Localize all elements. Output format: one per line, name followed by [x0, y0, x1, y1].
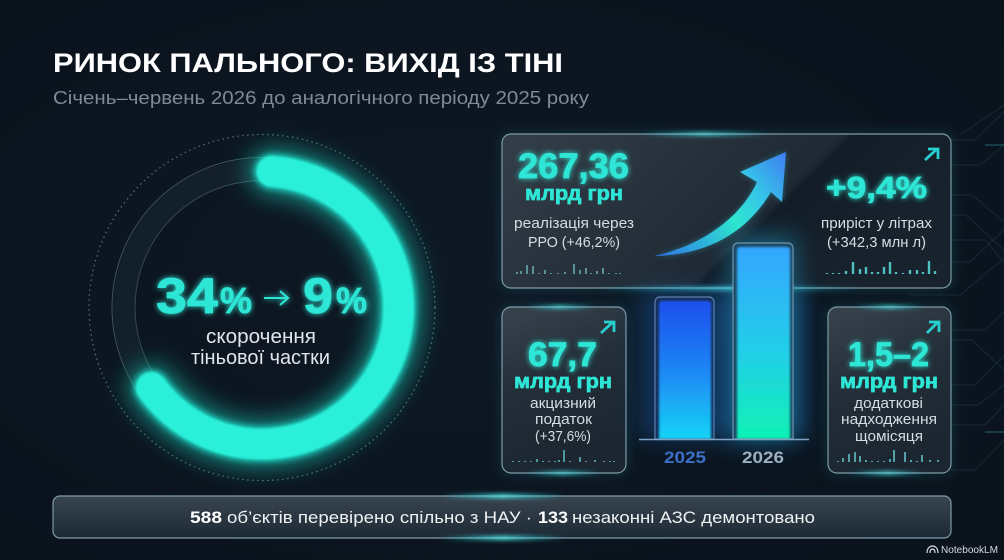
description: monthly additional income: щомісяця: [855, 428, 923, 445]
description: excise tax: податок: [535, 411, 592, 428]
donut value: 34% to 9%: 9: [303, 268, 333, 324]
metric: +9,4%: +9,4%: [826, 170, 927, 205]
description: RRO sales: [514, 215, 634, 251]
description: litres growth: приріст у літрах: [821, 215, 932, 232]
icon: up-right arrow: [927, 322, 939, 333]
panel: revenue and volume: [502, 132, 951, 290]
description: litres growth: (+342,3 млн л): [827, 234, 926, 251]
description: excise tax: (+37,6%): [535, 428, 591, 445]
description: excise tax: [530, 395, 596, 445]
panel: excise tax: [502, 306, 626, 474]
description: RRO sales: реалізація через: [514, 215, 634, 232]
bar chart: [639, 236, 809, 467]
NotebookLM mark: NotebookLM: [941, 545, 998, 556]
donut value: 34% to 9%: %: [336, 280, 367, 321]
donut caption: [191, 326, 330, 369]
footer text: об’єктів перевірено спільно з НАУ ·: [227, 508, 532, 527]
mini bars: [827, 261, 935, 274]
donut caption: тіньової частки: [191, 347, 330, 369]
icon: up-right arrow: [925, 149, 938, 160]
icon: up-right arrow: [601, 322, 614, 333]
mini bars: [517, 264, 620, 274]
description: litres growth: [821, 215, 932, 251]
unit: billion UAH: млрд грн: [514, 371, 612, 393]
metric: 267,36: 267,36: [518, 147, 629, 186]
footer bar: [53, 494, 951, 540]
footer text: 133: [538, 508, 568, 527]
unit: billion UAH: млрд грн: [525, 183, 623, 205]
description: monthly additional income: [841, 395, 937, 445]
unit: billion UAH: млрд грн: [840, 371, 938, 393]
bar: 2025: [655, 297, 714, 439]
bar: 2026: [730, 236, 796, 439]
footer text: 588: [190, 508, 222, 527]
label: 2026: 2026: [742, 448, 784, 467]
donut caption: скорочення: [206, 326, 316, 348]
mini bars: [838, 450, 938, 462]
panel: additional revenue: [828, 306, 951, 474]
description: excise tax: акцизний: [530, 395, 596, 412]
axis baseline: [639, 438, 809, 440]
metric: 67,7: 67,7: [528, 336, 597, 374]
footer text: незаконні АЗС демонтовано: [572, 508, 815, 527]
footer text: [190, 508, 815, 527]
donut value: 34% to 9%: [156, 268, 367, 324]
donut value: 34% to 9%: %: [220, 280, 252, 321]
circuit lines: [910, 105, 1004, 470]
description: RRO sales: РРО (+46,2%): [528, 234, 620, 251]
donut chart: shadow share: [89, 134, 435, 480]
title: РИНОК ПАЛЬНОГО: ВИХІД ІЗ ТІНІ: [53, 48, 563, 78]
description: monthly additional income: додаткові: [854, 395, 923, 412]
arrow: growth: [654, 152, 786, 256]
metric: 1,5–2: 1,5–2: [848, 336, 929, 374]
description: monthly additional income: надходження: [841, 411, 937, 428]
label: 2025: 2025: [664, 448, 706, 467]
subtitle: Січень–червень 2026 до аналогічного періоду 2025 року: [53, 88, 589, 108]
mini bars: [513, 450, 614, 462]
donut value: 34% to 9%: 34: [156, 268, 218, 324]
